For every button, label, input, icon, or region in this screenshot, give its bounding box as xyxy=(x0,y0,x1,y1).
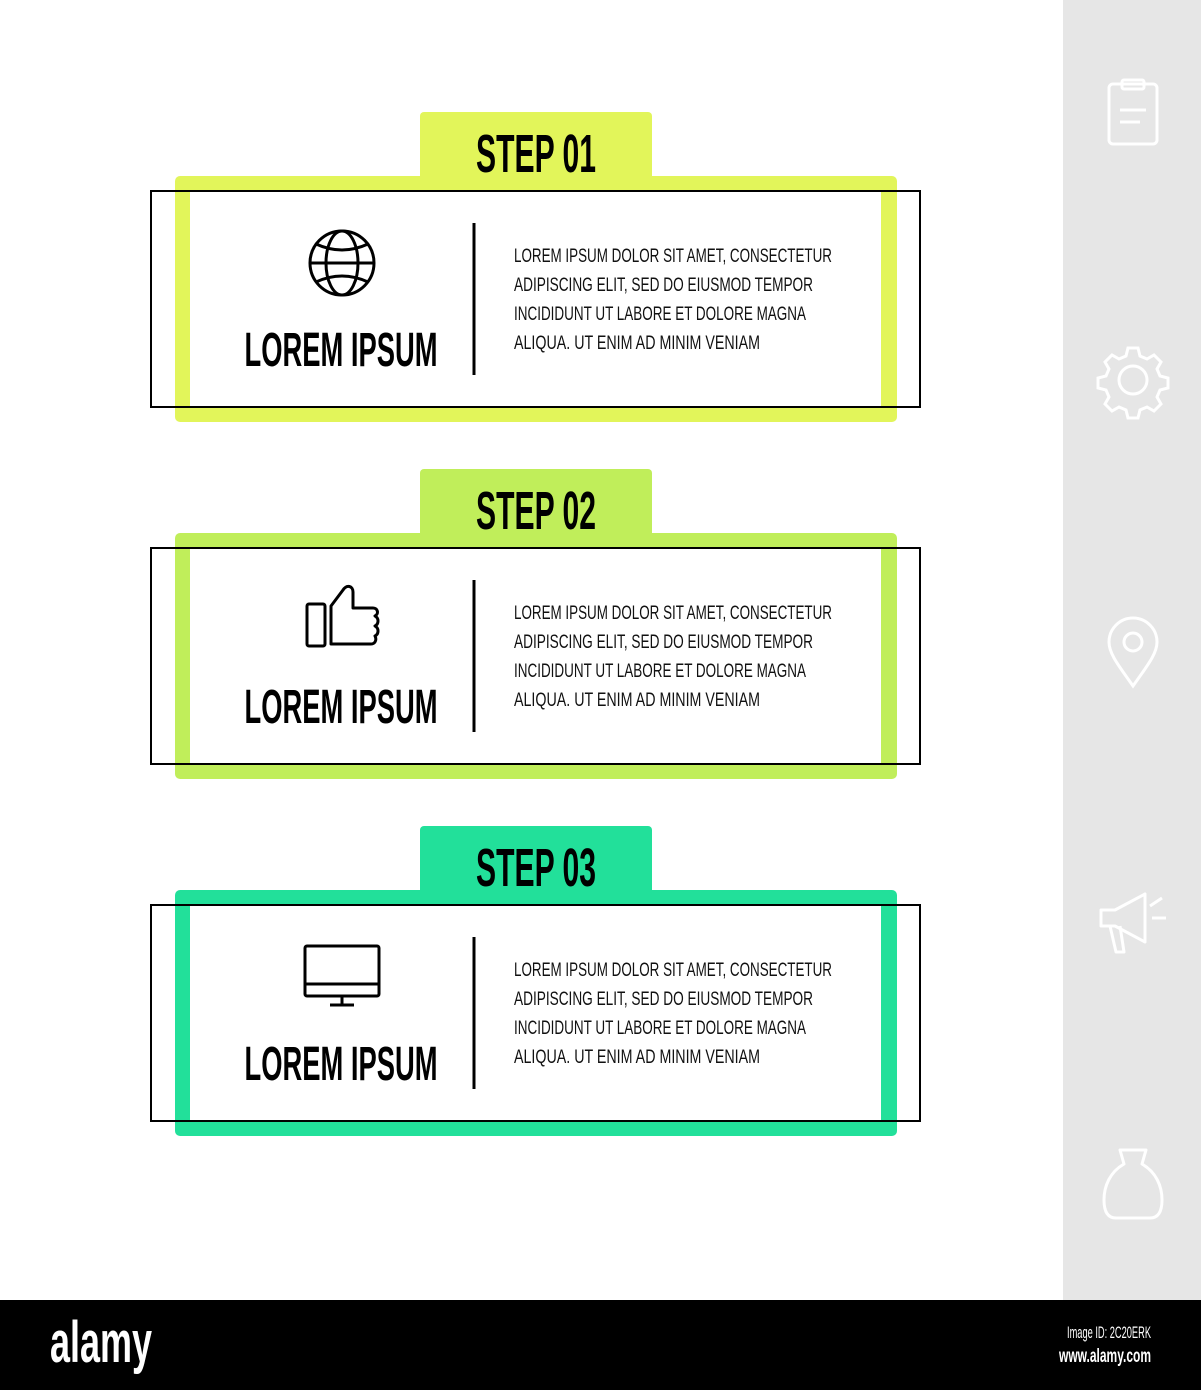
icon: bag xyxy=(1104,1150,1162,1218)
icon: clipboard xyxy=(1109,80,1157,144)
footer bar: www.alamy.com xyxy=(1058,1346,1151,1367)
tab: step 03 xyxy=(420,826,652,898)
icon: megaphone xyxy=(1101,894,1166,952)
panel: step 01 xyxy=(151,112,920,422)
text block xyxy=(514,246,832,354)
icon: gear xyxy=(1098,348,1168,418)
icon: monitor xyxy=(305,946,379,1005)
footer bar: alamy xyxy=(50,1310,152,1375)
text block: INCIDIDUNT UT LABORE ET DOLORE MAGNA xyxy=(514,304,806,325)
tab: step 01: STEP 01 xyxy=(476,124,596,184)
text block: ALIQUA. UT ENIM AD MINIM VENIAM xyxy=(514,333,760,354)
heading: LOREM IPSUM xyxy=(244,1038,438,1091)
text block: LOREM IPSUM DOLOR SIT AMET, CONSECTETUR xyxy=(514,960,832,981)
heading: LOREM IPSUM xyxy=(244,681,438,734)
text block xyxy=(514,960,832,1068)
heading: LOREM IPSUM xyxy=(244,324,438,377)
text block: ADIPISCING ELIT, SED DO EIUSMOD TEMPOR xyxy=(514,989,813,1010)
text block: LOREM IPSUM DOLOR SIT AMET, CONSECTETUR xyxy=(514,246,832,267)
tab: step 03: STEP 03 xyxy=(476,838,596,898)
text block: ALIQUA. UT ENIM AD MINIM VENIAM xyxy=(514,690,760,711)
text block: INCIDIDUNT UT LABORE ET DOLORE MAGNA xyxy=(514,661,806,682)
panel: step 02 xyxy=(151,469,920,779)
text block: ADIPISCING ELIT, SED DO EIUSMOD TEMPOR xyxy=(514,275,813,296)
tab: step 02: STEP 02 xyxy=(476,481,596,541)
tab: step 02 xyxy=(420,469,652,541)
text block: ADIPISCING ELIT, SED DO EIUSMOD TEMPOR xyxy=(514,632,813,653)
panel: step 03 xyxy=(151,826,920,1136)
text block: INCIDIDUNT UT LABORE ET DOLORE MAGNA xyxy=(514,1018,806,1039)
sidebar xyxy=(1063,0,1201,1300)
text block: ALIQUA. UT ENIM AD MINIM VENIAM xyxy=(514,1047,760,1068)
text block xyxy=(514,603,832,711)
footer bar xyxy=(0,1300,1201,1390)
icon: thumbs up xyxy=(307,586,378,646)
icon: location pin xyxy=(1109,618,1157,686)
text block: LOREM IPSUM DOLOR SIT AMET, CONSECTETUR xyxy=(514,603,832,624)
tab: step 01 xyxy=(420,112,652,184)
icon: globe xyxy=(310,231,374,295)
